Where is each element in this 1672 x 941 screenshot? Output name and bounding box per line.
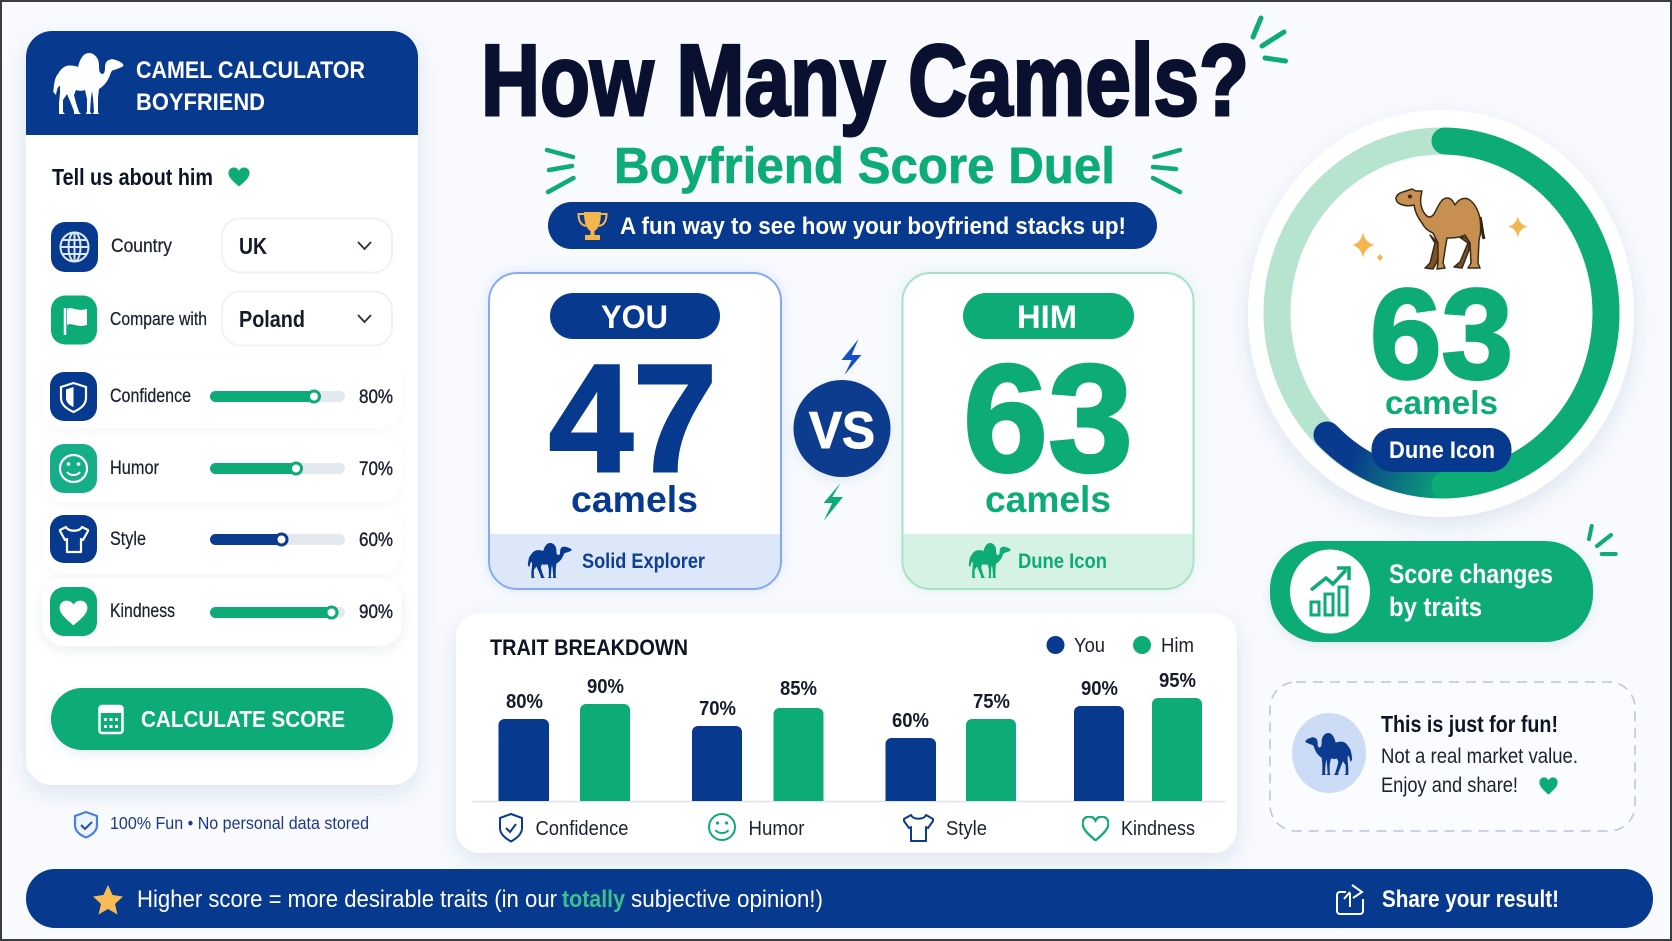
bar chart: 95%	[1159, 670, 1196, 692]
ring track	[1277, 141, 1606, 485]
tagline pill	[548, 202, 1157, 249]
select: Poland	[222, 292, 392, 346]
legend: Him	[1161, 635, 1194, 657]
header title: CAMEL CALCULATOR	[136, 57, 365, 84]
card: him score: 63	[963, 333, 1133, 504]
form heading: Tell us about him	[52, 164, 213, 190]
title: How Many Camels?	[481, 25, 1249, 137]
button: calculate score	[51, 688, 393, 750]
score gauge: camels	[1385, 384, 1498, 421]
axis label: confidence: Confidence	[536, 818, 628, 840]
button: calculate score: CALCULATE SCORE	[141, 706, 345, 732]
bottom banner	[26, 869, 1653, 928]
select: UK: UK	[239, 233, 267, 259]
banner text: Higher score = more desirable traits (in our	[137, 886, 557, 913]
slider: kindness: 90%	[359, 602, 393, 623]
slider: humor	[42, 434, 402, 502]
panel header	[26, 31, 418, 135]
select: Poland: Poland	[239, 306, 305, 332]
callout: score changes by traits	[1270, 526, 1616, 642]
select: UK	[222, 218, 392, 272]
badge: you	[550, 293, 720, 339]
axis label: style	[904, 815, 987, 841]
axis label: style: Style	[946, 818, 987, 840]
callout: just for fun disclaimer: This is just for fun!	[1381, 711, 1558, 737]
bar chart: 70%	[699, 698, 736, 720]
vs badge	[794, 339, 890, 521]
share action: Share your result!	[1382, 886, 1559, 913]
icon: shield	[50, 372, 97, 421]
card: you score: 47	[549, 333, 717, 504]
icon: white camel	[53, 53, 123, 114]
card: you score	[489, 273, 781, 589]
axis label: humor: Humor	[748, 818, 805, 840]
slider: style	[42, 506, 402, 574]
rank: solid explorer: Solid Explorer	[582, 550, 705, 573]
subtitle: Boyfriend Score Duel	[614, 137, 1115, 194]
header title	[136, 57, 365, 116]
card: him score: camels	[985, 479, 1111, 520]
panel: trait breakdown chart	[456, 613, 1237, 853]
icon: flag	[51, 296, 97, 344]
tagline pill: A fun way to see how your boyfriend stacks up!	[620, 213, 1126, 240]
score gauge	[1248, 110, 1634, 517]
callout: score changes by traits: by traits	[1389, 592, 1482, 622]
badge: dune icon: Dune Icon	[1389, 437, 1495, 464]
callout: just for fun disclaimer	[1270, 682, 1635, 831]
card: him score	[902, 273, 1194, 589]
share action	[1337, 885, 1559, 914]
badge: him: HIM	[1017, 299, 1077, 335]
slider: style: 60%	[359, 530, 393, 551]
icon: trophy	[578, 212, 606, 240]
axis label: kindness	[1083, 817, 1195, 840]
slider: confidence: 80%	[359, 387, 393, 408]
bar chart: 60%	[892, 710, 929, 732]
icon: calculator	[100, 706, 122, 733]
icon: star	[93, 885, 123, 914]
panel: camel calculator form	[26, 31, 418, 785]
slider: style: Style	[110, 529, 146, 550]
lightning: blue	[842, 339, 861, 375]
field: country	[51, 218, 392, 272]
privacy note: 100% Fun • No personal data stored	[110, 813, 369, 833]
rank: dune icon	[969, 543, 1107, 578]
ring progress	[1327, 141, 1606, 485]
bar chart: 75%	[973, 691, 1010, 713]
bar chart: 90%	[587, 676, 624, 698]
badge: him	[963, 293, 1134, 339]
callout: just for fun disclaimer: Enjoy and share!	[1381, 774, 1518, 797]
slider: kindness	[42, 578, 402, 646]
icon: blue camel	[1305, 733, 1352, 775]
field: country: Country	[111, 236, 172, 257]
panel: trait breakdown chart: TRAIT BREAKDOWN	[490, 635, 688, 660]
badge: you: YOU	[601, 299, 668, 335]
icon: smile	[50, 444, 97, 493]
sparkles	[1352, 216, 1528, 261]
callout: just for fun disclaimer: Not a real market value.	[1381, 745, 1578, 768]
icon: tan camel	[1396, 189, 1484, 269]
field: compare with: Compare with	[110, 309, 207, 329]
badge: dune icon	[1372, 428, 1512, 472]
rank: dune icon: Dune Icon	[1018, 550, 1107, 573]
slider: humor: Humor	[110, 458, 160, 479]
icon: t-shirt	[50, 515, 97, 563]
bar chart	[472, 670, 1225, 802]
header title: BOYFRIEND	[136, 89, 265, 116]
banner text: totally	[562, 886, 626, 913]
card: you score: camels	[571, 479, 698, 520]
icon: heart	[50, 587, 97, 636]
icon: globe	[51, 222, 98, 272]
bar chart: 90%	[1081, 678, 1118, 700]
score gauge: 63	[1370, 263, 1513, 406]
vs badge: VS	[809, 402, 875, 460]
legend	[1046, 635, 1194, 657]
bar chart: 85%	[780, 678, 817, 700]
legend: You	[1074, 635, 1105, 657]
slider: humor: 70%	[359, 459, 393, 480]
slider: confidence: Confidence	[110, 386, 191, 407]
slider: confidence	[42, 360, 402, 428]
slider: kindness: Kindness	[110, 601, 175, 622]
privacy note	[75, 812, 369, 838]
lightning: green	[824, 483, 843, 521]
axis label: confidence	[500, 814, 628, 842]
title spark lines	[1253, 18, 1286, 61]
icon: rising chart	[1311, 568, 1349, 615]
callout: score changes by traits: Score changes	[1389, 559, 1553, 589]
field: compare with	[51, 292, 392, 346]
rank: solid explorer	[528, 543, 705, 578]
axis label: kindness: Kindness	[1121, 818, 1195, 840]
axis label: humor	[709, 814, 805, 840]
bar chart: 80%	[506, 691, 543, 713]
banner text: subjective opinion!)	[631, 886, 823, 913]
banner text	[137, 886, 823, 913]
